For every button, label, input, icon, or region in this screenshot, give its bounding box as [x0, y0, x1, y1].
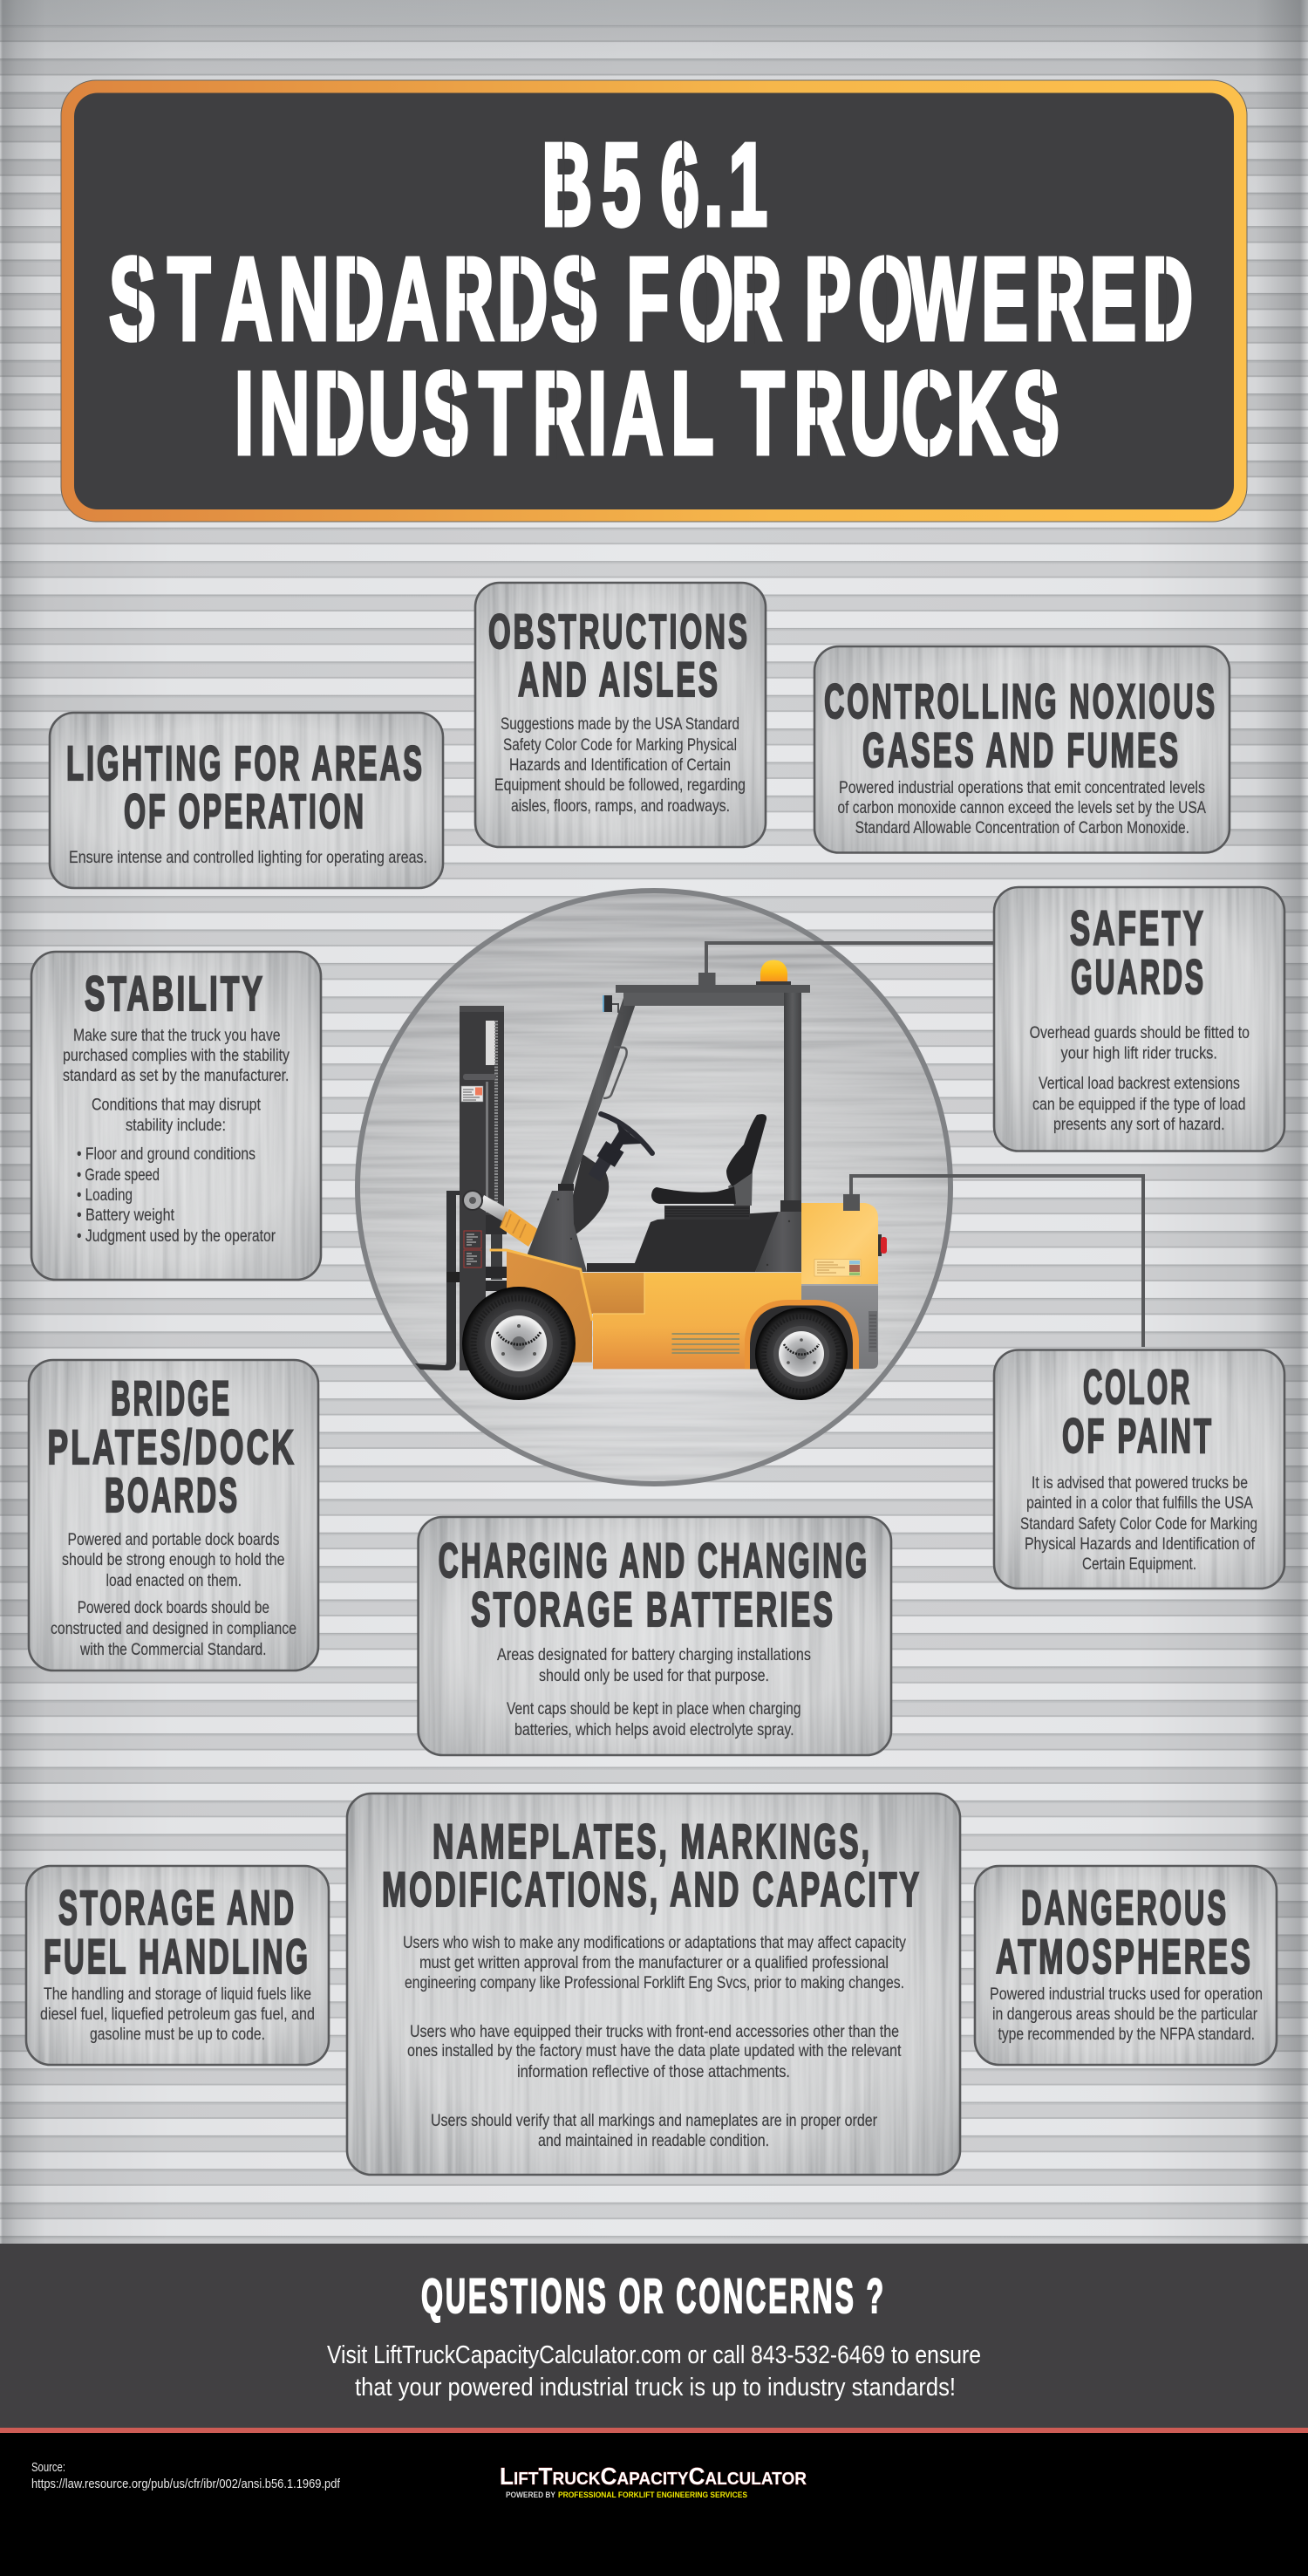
heading: obstructions and aisles: OBSTRUCTIONS [488, 604, 750, 659]
heading: lighting: OF OPERATION [124, 783, 366, 838]
red divider [0, 2428, 1308, 2433]
panel: bridge plates / dock boards [29, 1360, 318, 1671]
forklift illustration [415, 960, 887, 1400]
body text: Users who wish to make any modifications or adaptations that may affect capacity [403, 1933, 906, 1952]
panel: storage and fuel handling [26, 1866, 329, 2065]
heading: bridge plates: BRIDGE [111, 1370, 232, 1425]
title text: B56.1 [542, 119, 767, 250]
body text: information reflective of those attachments. [517, 2062, 790, 2081]
connector block: overhead guard [698, 973, 715, 985]
bullet list: • Battery weight [77, 1206, 174, 1225]
body text: purchased complies with the stability [63, 1046, 290, 1065]
heading: safety guards: GUARDS [1071, 949, 1206, 1004]
title banner [61, 80, 1247, 522]
logo: LIFTTRUCKCAPACITYCALCULATOR [500, 2463, 807, 2490]
body text [403, 1933, 906, 2150]
heading: obstructions and aisles: AND AISLES [518, 652, 720, 707]
body text: presents any sort of hazard. [1053, 1115, 1224, 1134]
body text: Powered dock boards should be [78, 1598, 269, 1617]
body text: Physical Hazards and Identification of [1025, 1534, 1255, 1554]
dash panel [567, 1154, 609, 1235]
body text: Overhead guards should be fitted to [1030, 1023, 1250, 1042]
body text: ones installed by the factory must have the data plate updated with the relevant [407, 2041, 902, 2060]
body text: constructed and designed in compliance [51, 1619, 296, 1638]
body text [837, 778, 1206, 837]
body text [990, 1985, 1263, 2044]
heading: nameplates [382, 1814, 922, 1917]
body text: painted in a color that fulfills the USA [1026, 1493, 1253, 1513]
call-to-action heading: QUESTIONS OR CONCERNS ? [421, 2268, 886, 2323]
body text: must get written approval from the manufacturer or a qualified professional [419, 1953, 889, 1972]
body text: Areas designated for battery charging installations [497, 1645, 811, 1664]
panel: safety guards [994, 887, 1284, 1151]
rear counterweight [801, 1203, 878, 1369]
grab handle [603, 1047, 627, 1098]
roof guard [616, 985, 810, 1213]
body text: Vent caps should be kept in place when charging [507, 1699, 800, 1718]
heading: safety guards [1070, 900, 1206, 1004]
body text: your high lift rider trucks. [1060, 1044, 1217, 1063]
body text: Hazards and Identification of Certain [509, 755, 731, 775]
seat [631, 1114, 779, 1272]
panel: stability [31, 952, 321, 1280]
wheel arch [745, 1300, 859, 1369]
body text: Conditions that may disrupt [92, 1096, 261, 1115]
mast data label [461, 1086, 483, 1102]
body text: stability include: [126, 1116, 226, 1135]
heading: controlling noxious gases and fumes [824, 673, 1217, 777]
heading: color of paint [1062, 1359, 1214, 1463]
body text: load enacted on them. [106, 1571, 242, 1590]
bullet list: • Judgment used by the operator [77, 1227, 276, 1246]
heading: dangerous atmospheres [996, 1880, 1253, 1984]
body text: with the Commercial Standard. [79, 1640, 267, 1659]
body text: engineering company like Professional Forklift Eng Svcs, prior to making changes. [405, 1973, 904, 1992]
front pillar [561, 993, 637, 1184]
title text: STANDARDS FOR POWERED [109, 233, 1193, 365]
source citation: https://law.resource.org/pub/us/cfr/ibr/002/ansi.b56.1.1969.pdf [31, 2477, 341, 2491]
source citation: Source: [31, 2460, 65, 2475]
mirror [603, 995, 625, 1015]
fork and carriage [415, 1191, 462, 1370]
body text: Ensure intense and controlled lighting for operating areas. [69, 848, 427, 867]
heading: safety guards: SAFETY [1070, 900, 1206, 955]
panel: charging and changing storage batteries [419, 1517, 891, 1755]
logo: POWERED BY [506, 2491, 555, 2499]
heading: charging: STORAGE BATTERIES [471, 1582, 835, 1636]
steering wheel [589, 1114, 652, 1182]
heading: storage: FUEL HANDLING [44, 1929, 310, 1984]
body text: aisles, floors, ramps, and roadways. [511, 796, 730, 816]
body text [1030, 1023, 1250, 1134]
body text: Users should verify that all markings and nameplates are in proper order [431, 2111, 877, 2130]
call-to-action band [0, 2244, 1308, 2428]
call-to-action text [327, 2341, 981, 2402]
rear label [814, 1260, 861, 1276]
body text: Make sure that the truck you have [73, 1026, 281, 1045]
heading: charging: CHARGING AND CHANGING [439, 1533, 869, 1588]
panel: color of paint [994, 1350, 1284, 1589]
heading: storage [44, 1880, 310, 1984]
rear wheel [755, 1308, 848, 1400]
panel: dangerous atmospheres [975, 1866, 1277, 2065]
connector block: paint [843, 1194, 860, 1211]
front wheel [462, 1287, 576, 1400]
body text: gasoline must be up to code. [90, 2025, 265, 2044]
body text: batteries, which helps avoid electrolyte spray. [514, 1720, 794, 1739]
heading: storage: STORAGE AND [58, 1880, 296, 1935]
bullet list [77, 1145, 276, 1246]
body text: Certain Equipment. [1082, 1554, 1196, 1574]
vents [671, 1334, 739, 1353]
body text: should be strong enough to hold the [62, 1550, 284, 1569]
body text: can be equipped if the type of load [1032, 1095, 1245, 1114]
body text: standard as set by the manufacturer. [63, 1066, 290, 1085]
body text: Standard Allowable Concentration of Carbon Monoxide. [855, 818, 1189, 837]
heading: nameplates: NAMEPLATES, MARKINGS, [433, 1814, 872, 1869]
heading: charging [439, 1533, 869, 1636]
mast [460, 1006, 507, 1370]
heading: stability: STABILITY [85, 966, 265, 1021]
title text [109, 119, 1193, 479]
heading: obstructions and aisles [488, 604, 750, 707]
body text [40, 1985, 315, 2044]
body text: diesel fuel, liquefied petroleum gas fuel, and [40, 2005, 315, 2024]
warning labels [464, 1231, 481, 1268]
main body [490, 1250, 859, 1369]
body text: of carbon monoxide cannon exceed the levels set by the USA [837, 798, 1206, 817]
body text [497, 1645, 811, 1739]
bullet list: • Floor and ground conditions [77, 1145, 255, 1164]
connector line: overhead guard to safety guards [706, 943, 994, 973]
source citation [31, 2460, 341, 2491]
body text: Powered industrial operations that emit concentrated levels [839, 778, 1205, 797]
heading: lighting [66, 735, 425, 838]
panel: nameplates, markings, modifications, and capacity [347, 1794, 960, 2175]
panel: controlling noxious gases and fumes [814, 646, 1230, 853]
call-to-action text: Visit LiftTruckCapacityCalculator.com or call 843-532-6469 to ensure [327, 2341, 981, 2369]
heading: bridge plates: PLATES/DOCK [47, 1419, 296, 1474]
logo: PROFESSIONAL FORKLIFT ENGINEERING SERVICES [558, 2491, 747, 2499]
forklift medallion [358, 891, 950, 1484]
call-to-action text: that your powered industrial truck is up to industry standards! [355, 2374, 956, 2402]
cylinder [462, 1190, 539, 1247]
panel: lighting for areas of operation [50, 713, 443, 888]
body text: Powered and portable dock boards [68, 1530, 280, 1549]
body text [1020, 1473, 1257, 1574]
tail light [878, 1234, 887, 1256]
heading: lighting: LIGHTING FOR AREAS [66, 735, 425, 790]
heading: color of paint: COLOR [1083, 1359, 1192, 1414]
heading: nameplates: MODIFICATIONS, AND CAPACITY [382, 1862, 922, 1917]
body text: and maintained in readable condition. [538, 2131, 769, 2150]
panel: obstructions and aisles [475, 583, 766, 847]
body text [494, 714, 746, 816]
floor and gussets [528, 1184, 801, 1272]
title text: INDUSTRIAL TRUCKS [235, 347, 1059, 479]
body text: Vertical load backrest extensions [1039, 1074, 1240, 1093]
body text: Suggestions made by the USA Standard [501, 714, 739, 734]
connector line: paint to color of paint [851, 1176, 1143, 1347]
bullet list: • Grade speed [77, 1165, 160, 1185]
beacon [756, 960, 791, 985]
bullet list: • Loading [77, 1186, 133, 1205]
body text [51, 1530, 296, 1659]
footer band [0, 2433, 1308, 2576]
heading: bridge plates [47, 1370, 296, 1522]
body text: Equipment should be followed, regarding [494, 776, 746, 795]
body text: Users who have equipped their trucks with front-end accessories other than the [410, 2022, 899, 2041]
body text: The handling and storage of liquid fuels like [44, 1985, 311, 2004]
body text: should only be used for that purpose. [539, 1666, 769, 1685]
body text: Safety Color Code for Marking Physical [503, 735, 737, 755]
body text: It is advised that powered trucks be [1032, 1473, 1248, 1493]
body text [63, 1026, 290, 1135]
heading: bridge plates: BOARDS [105, 1467, 240, 1522]
